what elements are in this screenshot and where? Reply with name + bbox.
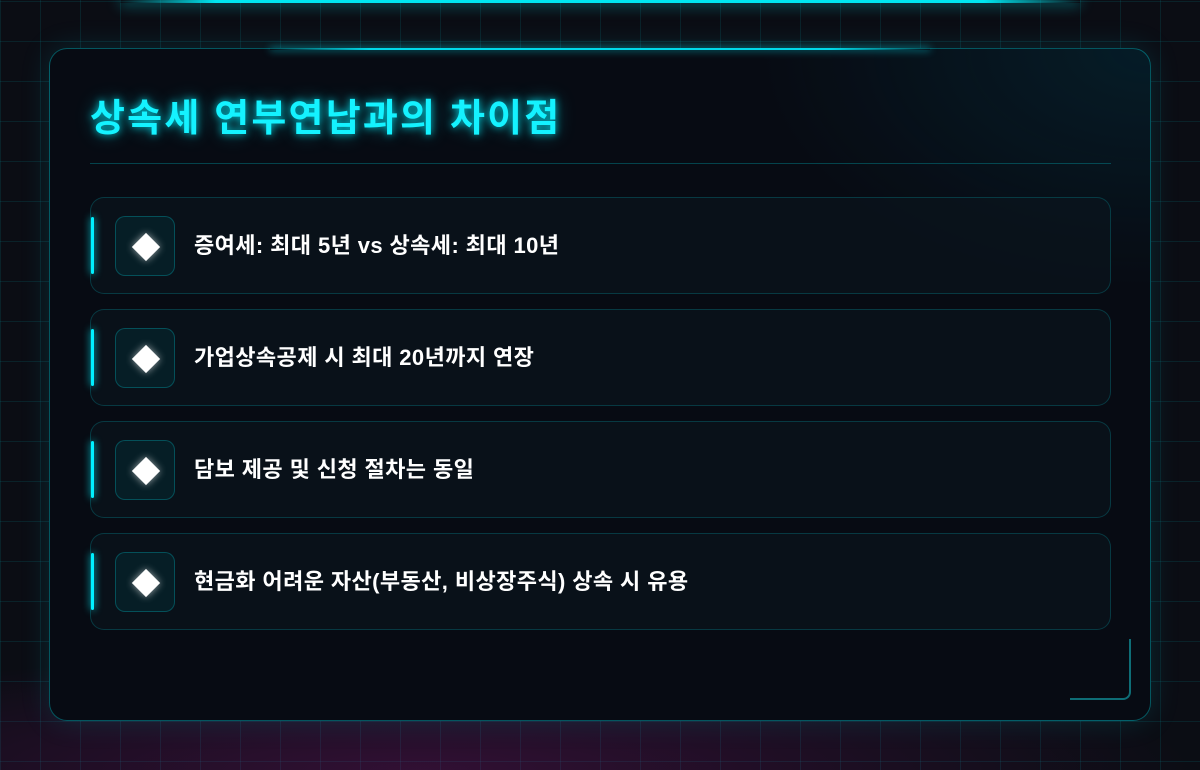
- icon: diamond: [115, 440, 175, 500]
- text 4: 현금화 어려운 자산(부동산, 비상장주식) 상속 시 유용: [194, 569, 688, 594]
- icon: diamond: [115, 216, 175, 276]
- icon: diamond: [115, 328, 175, 388]
- item 4: [90, 533, 1111, 630]
- item 1: [90, 197, 1111, 294]
- text 1: 증여세: 최대 5년 vs 상속세: 최대 10년: [194, 233, 559, 258]
- text 3: 담보 제공 및 신청 절차는 동일: [194, 457, 474, 482]
- title: 상속세 연부연납과의 차이점: [90, 98, 561, 140]
- text 2: 가업상속공제 시 최대 20년까지 연장: [194, 345, 534, 370]
- icon: diamond: [115, 552, 175, 612]
- item 2: [90, 309, 1111, 406]
- item 3: [90, 421, 1111, 518]
- corner bracket: [1070, 639, 1131, 700]
